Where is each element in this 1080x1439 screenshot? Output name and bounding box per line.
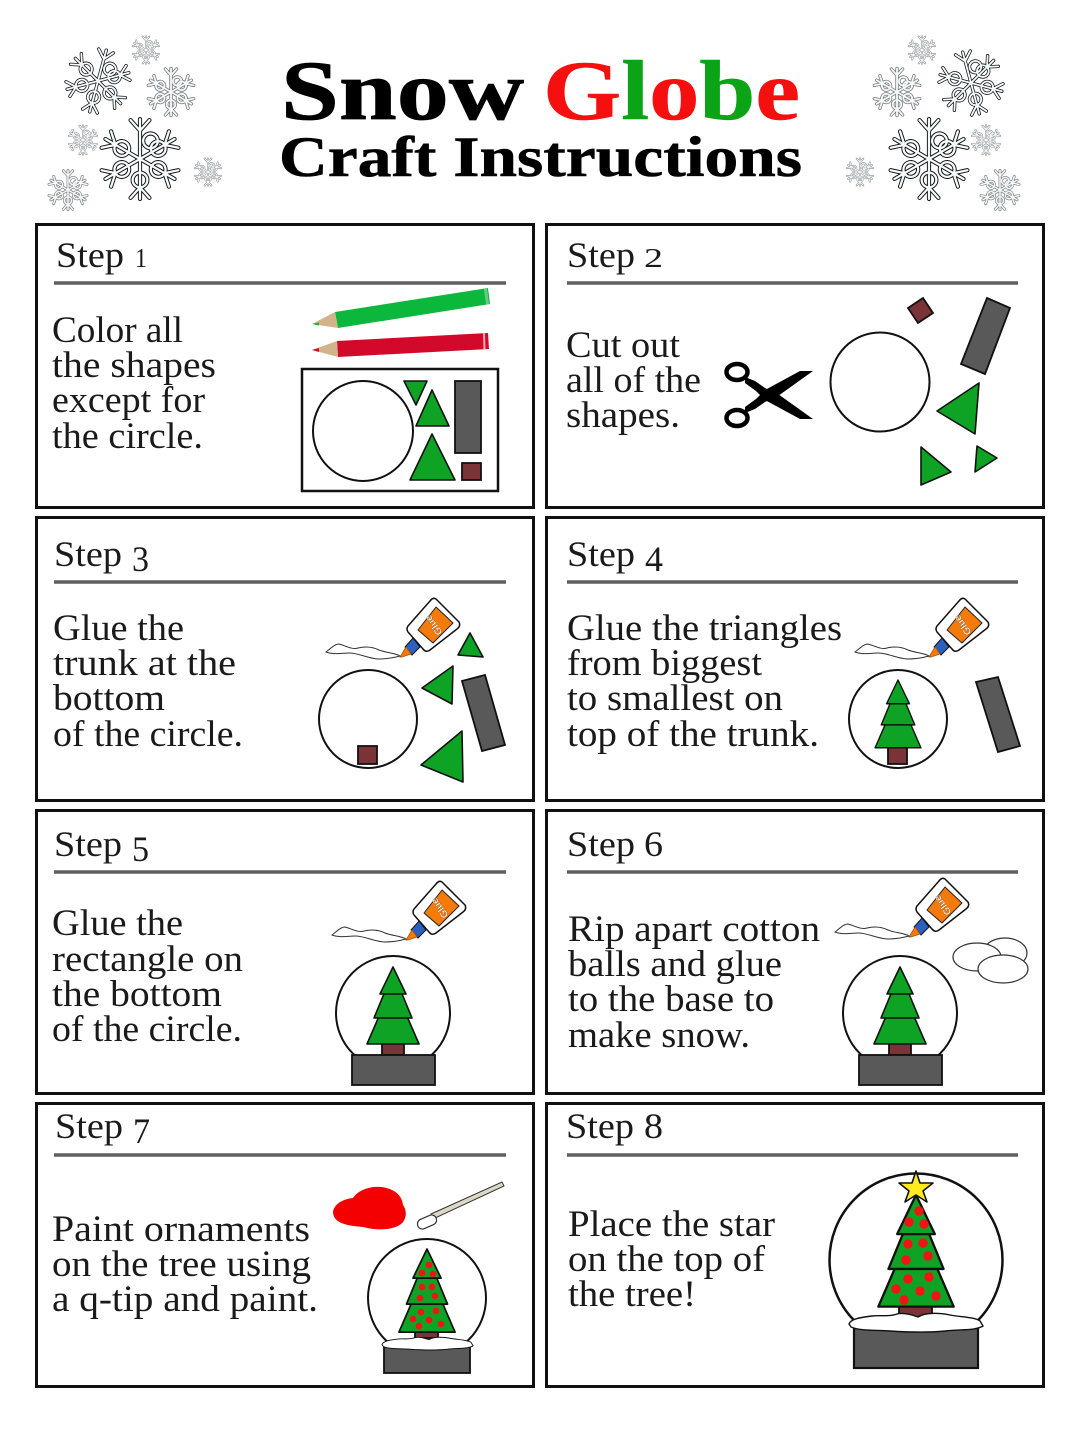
step 3 text: of the circle. (53, 714, 243, 755)
circle with trunk and loose shapes (319, 633, 505, 782)
snow globe with ornaments (368, 1239, 486, 1373)
panel: step 5 (36, 810, 534, 1094)
step 6 text: balls and glue (568, 944, 782, 985)
step 3 heading (54, 534, 149, 579)
step 1 text: the shapes (52, 345, 216, 386)
icon: green pencil (312, 288, 490, 328)
step 6 heading (567, 824, 663, 864)
icon: red pencil (312, 333, 489, 357)
ornaments (410, 1262, 444, 1329)
panel: step 3 (36, 518, 534, 800)
step 4 text: Glue the triangles (567, 608, 842, 649)
step 8 heading (566, 1106, 663, 1146)
icon: red paint blob (333, 1187, 406, 1229)
step 1 heading: 1 (135, 243, 147, 273)
step 2 text: all of the (566, 360, 701, 401)
step 4 heading: Step (567, 534, 635, 574)
snowflakes right (847, 36, 1019, 210)
panel: step 4 (546, 518, 1044, 800)
step 6 text: make snow. (568, 1015, 750, 1056)
step 8 heading: 8 (644, 1106, 663, 1146)
icon: glue bottle (326, 598, 460, 659)
step 7 text (52, 1209, 318, 1320)
icon: yellow star (899, 1171, 933, 1202)
step 1 heading: Step (56, 235, 124, 275)
step 5 text: Glue the (52, 903, 183, 944)
panel: step 1 (36, 224, 534, 508)
step 4 heading: 4 (645, 539, 663, 579)
circle with tree and rectangle (849, 670, 1020, 768)
step 6 heading: 6 (644, 824, 663, 864)
panel: step 6 (546, 810, 1044, 1094)
finished snow globe (830, 1171, 1002, 1368)
step 6 text (568, 909, 820, 1056)
step 6 text: Rip apart cotton (568, 909, 820, 950)
title: Craft Instructions (279, 126, 802, 189)
step 5 text: the bottom (52, 974, 222, 1015)
icon: glue bottle (835, 878, 969, 939)
step 5 text: of the circle. (52, 1009, 242, 1050)
step 5 text: rectangle on (52, 939, 243, 980)
step 2 text: Cut out (566, 325, 681, 366)
cut out shapes (830, 298, 1010, 485)
step 7 heading (55, 1106, 150, 1151)
step 3 text: bottom (53, 678, 165, 719)
icon: scissors (726, 364, 813, 426)
step 4 heading (567, 534, 663, 579)
ornaments (891, 1206, 941, 1305)
icon: cotton balls (953, 938, 1028, 983)
template sheet of shapes (302, 369, 498, 491)
step 2 text (566, 325, 701, 436)
title: Globe (543, 44, 800, 138)
step 4 text (567, 608, 842, 755)
step 3 heading: Step (54, 534, 122, 574)
panel: step 2 (546, 224, 1044, 508)
step 3 text: Glue the (53, 608, 184, 649)
snow globe with tree and base (843, 956, 957, 1085)
title: Snow (281, 44, 524, 138)
step 1 text: Color all (52, 310, 183, 351)
step 5 heading (54, 824, 149, 869)
step 8 text: Place the star (568, 1204, 775, 1245)
title (279, 44, 802, 189)
step 7 text: a q-tip and paint. (52, 1279, 318, 1320)
step 7 text: Paint ornaments (52, 1209, 310, 1250)
step 6 text: to the base to (568, 979, 774, 1020)
step 3 text (53, 608, 243, 755)
step 7 heading: 7 (133, 1111, 150, 1151)
step 4 text: top of the trunk. (567, 714, 819, 755)
icon: q-tip (416, 1182, 504, 1231)
step 3 text: trunk at the (53, 643, 236, 684)
step 2 text: shapes. (566, 395, 680, 436)
step 8 heading: Step (566, 1106, 634, 1146)
step 7 text: on the tree using (52, 1244, 311, 1285)
step 2 heading: Step (567, 235, 635, 275)
step 6 heading: Step (567, 824, 635, 864)
step 5 heading: Step (54, 824, 122, 864)
step 8 text (568, 1204, 775, 1315)
step 8 text: the tree! (568, 1274, 696, 1315)
step 3 heading: 3 (132, 539, 149, 579)
panel: step 7 (36, 1104, 534, 1386)
step 8 text: on the top of (568, 1239, 766, 1280)
snowflakes left (49, 36, 221, 210)
step 7 heading: Step (55, 1106, 123, 1146)
step 4 text: from biggest (567, 643, 763, 684)
step 1 text: except for (52, 380, 205, 421)
step 1 text: the circle. (52, 416, 203, 457)
step 4 text: to smallest on (567, 678, 783, 719)
icon: glue bottle (332, 881, 466, 942)
step 5 text (52, 903, 243, 1050)
snow globe with tree and base (336, 956, 450, 1085)
icon: glue bottle (855, 598, 989, 659)
step 5 heading: 5 (132, 829, 149, 869)
step 1 text (52, 310, 216, 457)
panel: step 8 (546, 1104, 1044, 1386)
step 2 heading: 2 (644, 243, 663, 273)
step 2 heading (567, 235, 663, 275)
